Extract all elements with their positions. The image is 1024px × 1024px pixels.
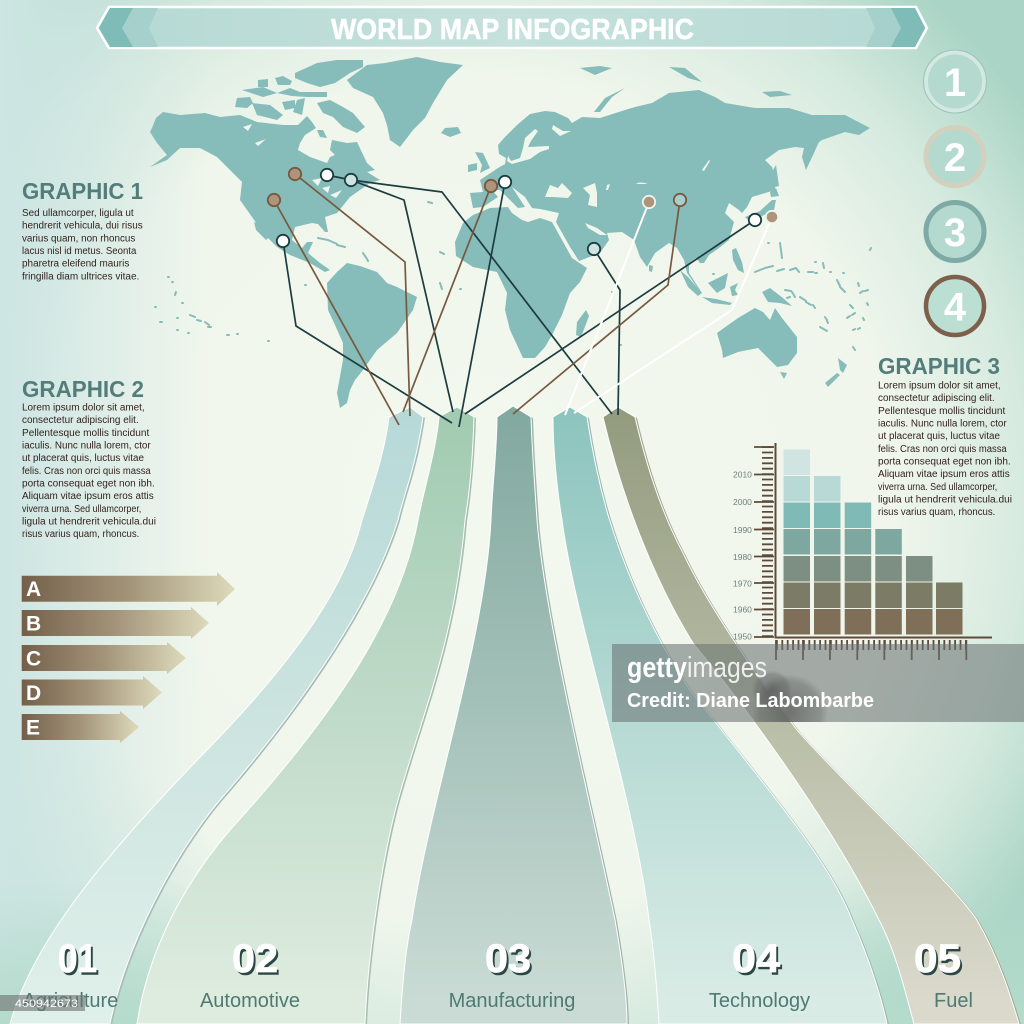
badge 4 xyxy=(926,277,984,335)
arrow bars A to E xyxy=(22,572,235,743)
category 04: 04 xyxy=(734,940,783,984)
brown connectors xyxy=(274,174,680,425)
category 04: 04 xyxy=(732,937,781,981)
graphic 3 body: porta consequat eget non ibh. xyxy=(878,456,1011,468)
category 03: 03 xyxy=(485,937,531,981)
graphic 2 body: Pellentesque mollis tincidunt xyxy=(22,428,150,439)
y axis labels xyxy=(733,470,752,642)
banner right chevrons xyxy=(866,8,925,47)
category 04: Technology xyxy=(709,990,810,1012)
stacked bar chart xyxy=(733,443,992,660)
category 05: 05 xyxy=(916,940,963,984)
badge 3: 3 xyxy=(944,211,966,255)
graphic 3 body: Aliquam vitae ipsum eros attis xyxy=(878,469,1010,480)
pale blue dots xyxy=(345,174,600,255)
Eurasian islands xyxy=(468,66,847,387)
graphic 3 body: iaculis. Nunc nulla lorem, ctor xyxy=(878,418,1007,430)
title banner xyxy=(97,7,927,48)
graphic 2 body: iaculis. Nunc nulla lorem, ctor xyxy=(22,440,151,452)
graphic 3 body: consectetur adipiscing elit. xyxy=(878,393,995,404)
category 02: 02 xyxy=(234,940,280,984)
y axis labels: 2000 xyxy=(733,497,752,507)
arrow C: C xyxy=(26,648,41,670)
graphic 1 body: hendrerit vehicula, dui risus xyxy=(22,221,143,232)
arrow E: E xyxy=(26,716,40,740)
number badges xyxy=(924,50,986,335)
left text: graphic 1 xyxy=(22,178,143,282)
category 02: Automotive xyxy=(200,990,300,1012)
graphic 3 body: risus varius quam, rhoncus. xyxy=(878,507,995,518)
badge 2 xyxy=(926,128,984,186)
graphic 1 body: lacus nisl id metus. Seonta xyxy=(22,246,137,257)
watermark credit: Credit: Diane Labombarbe xyxy=(627,690,874,712)
watermark logo xyxy=(627,652,767,684)
arrow B xyxy=(22,607,209,639)
category 03 xyxy=(449,937,575,1012)
badge 1: 1 xyxy=(944,61,966,105)
watermark panel xyxy=(612,644,1024,722)
graphic 3 body: ut placerat quis, luctus vitae xyxy=(878,431,1000,442)
Greenland xyxy=(347,57,463,147)
category 03: Manufacturing xyxy=(449,990,575,1012)
graphic 1 body xyxy=(22,208,143,282)
ribbon 4 xyxy=(553,407,889,1024)
graphic 3 body: viverra urna. Sed ullamcorper, xyxy=(878,482,997,493)
graphic 1 body: varius quam, non rhoncus xyxy=(22,233,135,244)
arrow B: B xyxy=(26,612,41,636)
banner left chevrons xyxy=(99,8,158,47)
graphic 2 body: viverra urna. Sed ullamcorper, xyxy=(22,504,141,515)
image id tag: 450942673 xyxy=(15,998,78,1010)
small islands xyxy=(155,202,871,350)
Africa xyxy=(455,207,587,358)
graphic 1 heading: GRAPHIC 1 xyxy=(22,178,143,204)
ribbon 1 xyxy=(10,407,425,1024)
graphic 3 body: felis. Cras non orci quis massa xyxy=(878,444,1007,455)
badge 3 xyxy=(926,202,984,260)
category 05 xyxy=(914,937,973,1012)
graphic 1 body: pharetra eleifend mauris xyxy=(22,259,129,270)
graphic 3 body: Pellentesque mollis tincidunt xyxy=(878,406,1006,417)
graphic 3 heading: GRAPHIC 3 xyxy=(878,353,1000,379)
right text: graphic 3 xyxy=(878,353,1012,518)
graphic 3 body xyxy=(878,380,1012,518)
category 01: Agriculture xyxy=(23,990,118,1012)
world map xyxy=(150,57,871,408)
watermark shading xyxy=(754,672,826,722)
dark connectors xyxy=(283,175,755,427)
white dots xyxy=(277,169,761,247)
graphic 2 body: Aliquam vitae ipsum eros attis xyxy=(22,491,154,502)
category 01: 01 xyxy=(58,937,97,981)
chart axes xyxy=(776,443,992,638)
North America xyxy=(150,112,380,272)
graphic 2 body: felis. Cras non orci quis massa xyxy=(22,466,151,477)
y axis labels: 1990 xyxy=(733,525,752,535)
arrow D xyxy=(22,676,162,709)
y axis labels: 2010 xyxy=(733,470,752,480)
y axis labels: 1950 xyxy=(733,632,752,642)
graphic 3 body: ligula ut hendrerit vehicula.dui xyxy=(878,494,1012,506)
arrow A xyxy=(22,572,235,606)
graphic 1 body: fringilla diam ultrices vitae. xyxy=(22,271,139,282)
graphic 2 body: ut placerat quis, luctus vitae xyxy=(22,453,144,464)
category 02: 02 xyxy=(232,937,278,981)
graphic 2 body: risus varius quam, rhoncus. xyxy=(22,529,139,540)
arrow D: D xyxy=(26,682,41,705)
Eurasia xyxy=(470,90,870,293)
Baja California xyxy=(254,222,268,240)
chart bars xyxy=(784,450,962,634)
ribbon 5 xyxy=(603,407,1021,1024)
South America xyxy=(327,263,417,408)
category 01: 01 xyxy=(60,940,99,984)
graphic 2 body xyxy=(22,402,156,540)
graphic 3 body: Lorem ipsum dolor sit amet, xyxy=(878,380,1001,392)
brown dots with light ring xyxy=(643,196,778,223)
ribbon 3 xyxy=(400,406,629,1024)
badge 2: 2 xyxy=(944,136,966,180)
bottom category labels xyxy=(23,937,973,1012)
image id tag xyxy=(0,995,85,1011)
ribbon 2 xyxy=(137,407,476,1024)
y axis labels: 1970 xyxy=(733,578,752,588)
y axis ticks xyxy=(754,446,774,637)
graphic 2 body: porta consequat eget non ibh. xyxy=(22,478,155,490)
arrow E xyxy=(22,711,139,743)
x axis ticks xyxy=(776,640,967,660)
map location dots xyxy=(268,168,778,255)
category 01 xyxy=(23,937,118,1012)
graphic 2 body: Lorem ipsum dolor sit amet, xyxy=(22,402,145,414)
pale dot with brown ring xyxy=(674,194,686,206)
category 03: 03 xyxy=(487,940,533,984)
watermark logo: images xyxy=(687,652,767,684)
left text: graphic 2 xyxy=(22,376,156,540)
graphic 2 body: ligula ut hendrerit vehicula.dui xyxy=(22,516,156,528)
arrow C xyxy=(22,642,186,674)
graphic 1 body: Sed ullamcorper, ligula ut xyxy=(22,208,134,219)
connector lines xyxy=(274,174,772,427)
Arctic islands xyxy=(235,60,461,138)
watermark logo: getty xyxy=(627,652,687,684)
inland seas xyxy=(243,124,710,235)
brown dots xyxy=(268,168,497,206)
category 05: 05 xyxy=(914,937,961,981)
category 05: Fuel xyxy=(934,990,973,1012)
y axis labels: 1980 xyxy=(733,552,752,562)
badge 1 xyxy=(924,50,986,113)
white connectors xyxy=(565,202,772,415)
graphic 2 heading: GRAPHIC 2 xyxy=(22,376,144,402)
y axis labels: 1960 xyxy=(733,604,752,614)
title text: WORLD MAP INFOGRAPHIC xyxy=(331,14,694,46)
graphic 2 body: consectetur adipiscing elit. xyxy=(22,415,139,426)
category 02 xyxy=(200,937,300,1012)
category 04 xyxy=(709,937,810,1012)
Madagascar xyxy=(576,310,589,337)
badge 4: 4 xyxy=(944,286,967,330)
arrow A: A xyxy=(26,578,41,601)
